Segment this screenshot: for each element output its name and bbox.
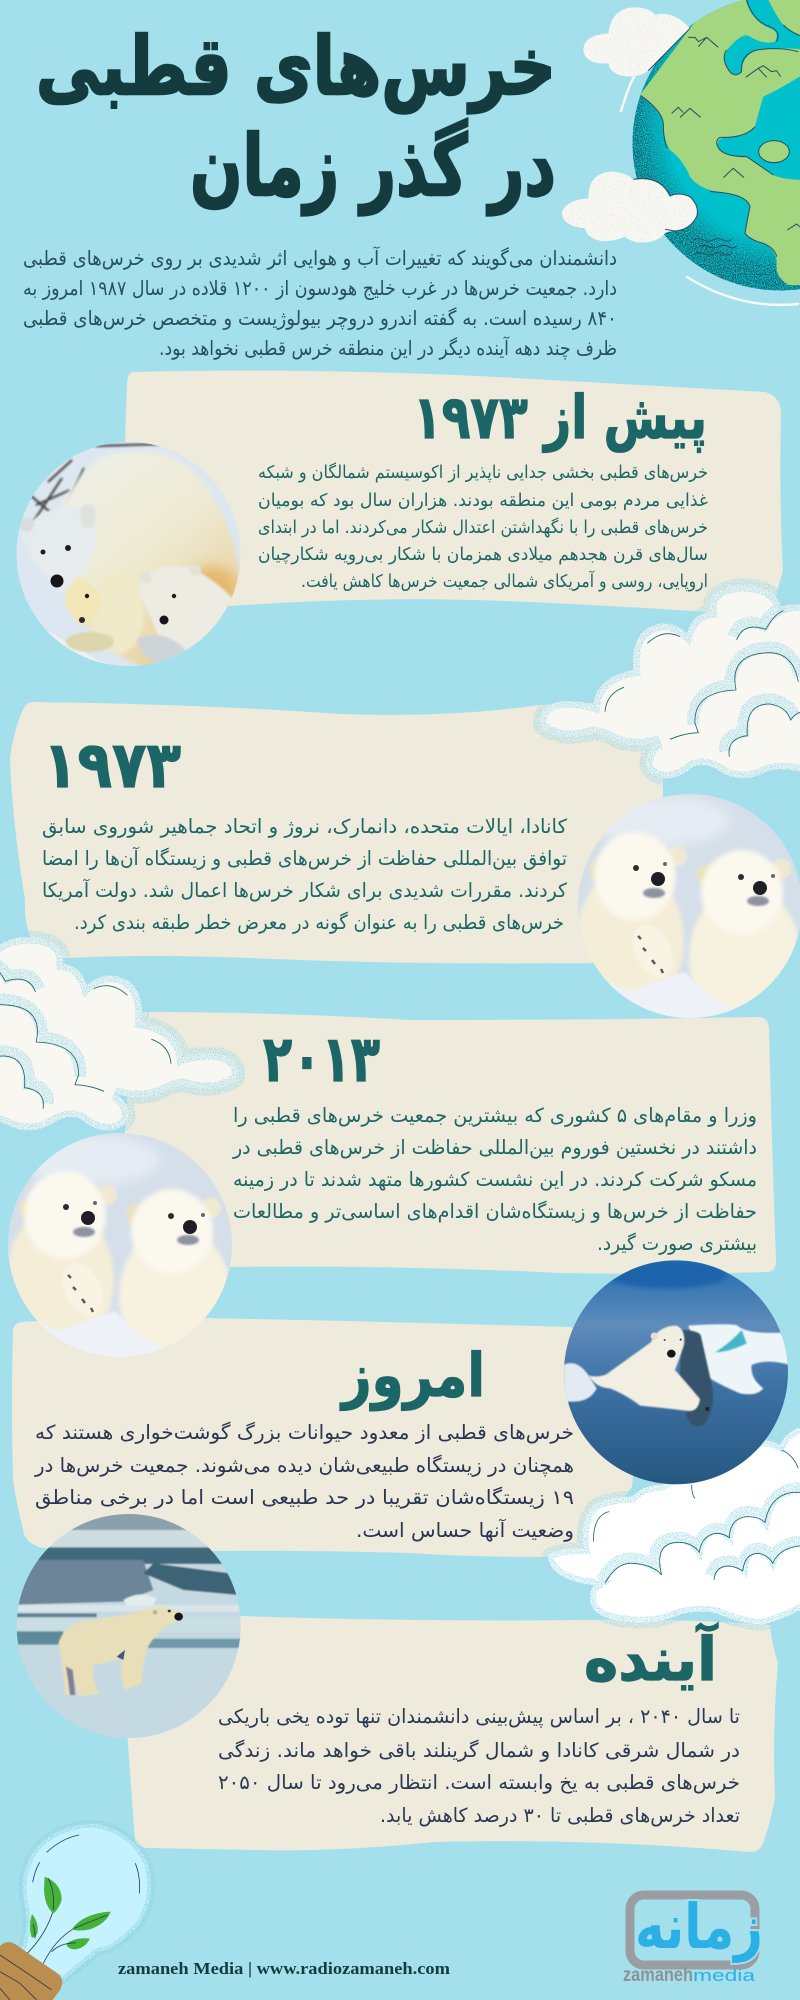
body text: future bbox=[218, 1705, 740, 1827]
body text: before 1973: خرس‌های قطبی بخشی جدایی ناپذیر از اکوسیستم شمالگان و شبکه bbox=[258, 462, 708, 483]
photo: two cubs left bbox=[5, 1130, 235, 1369]
panel: before 1973 bbox=[125, 371, 783, 612]
body text: future: تعداد خرس‌های قطبی تا ۳۰ درصد کاهش یابد. bbox=[380, 1804, 740, 1827]
panel: today bbox=[12, 1318, 640, 1557]
body text: today bbox=[34, 1421, 574, 1542]
logo: zamaneh media: zamaneh bbox=[623, 1965, 693, 1986]
body text: today: وضعیت آنها حساس است. bbox=[356, 1518, 574, 1542]
icon: cloud left of panel three bbox=[0, 937, 238, 1131]
photo: mother bear and cubs bbox=[16, 442, 242, 672]
body text: before 1973 bbox=[258, 462, 708, 592]
body text: future: تا سال ۲۰۴۰ ، بر اساس پیش‌بینی دانشمندان تنها توده یخی باریکی bbox=[218, 1705, 740, 1728]
logo: zamaneh media bbox=[623, 1890, 763, 1986]
panel: future bbox=[127, 1616, 778, 1852]
body text: today: خرس‌های قطبی از معدود حیوانات بزرگ گوشت‌خواری هستند که bbox=[35, 1421, 574, 1444]
intro text: دارد. جمعیت خرس‌ها در غرب خلیج هودسون از ۱۲۰۰ قلاده در سال ۱۹۸۷ امروز به bbox=[23, 276, 617, 300]
body text: 1973 bbox=[42, 815, 568, 934]
body text: before 1973: اروپایی، روسی و آمریکای شمالی جمعیت خرس‌ها کاهش یافت. bbox=[301, 570, 708, 592]
body text: 1973: کردند. مقررات شدیدی برای شکار خرس‌ها اعمال شد. دولت آمریکا bbox=[42, 878, 568, 902]
photo: bear on sea ice bbox=[16, 1514, 241, 1738]
icon: light bulb with plant bbox=[0, 1824, 151, 2000]
body text: 2013 bbox=[232, 1104, 757, 1255]
panel: 2013 bbox=[125, 1012, 776, 1274]
icon: upper cloud bbox=[583, 7, 690, 77]
footer credit: zamaneh Media | www.radiozamaneh.com bbox=[118, 1959, 450, 1978]
body text: before 1973: خرس‌های قطبی را با نگهداشتن اعتدال شکار می‌کردند. اما در ابتدای bbox=[258, 517, 708, 538]
photo: two cubs right bbox=[575, 791, 800, 1030]
intro text: دانشمندان می‌گویند که تغییرات آب و هوایی اثر شدیدی بر روی خرس‌های قطبی bbox=[23, 245, 617, 270]
body text: 2013: داشتند در نخستین فوروم بین‌المللی حفاظت از خرس‌های قطبی در bbox=[232, 1136, 757, 1159]
heading: future: آینده bbox=[584, 1622, 718, 1695]
body text: 2013: وزرا و مقام‌های ۵ کشوری که بیشترین جمعیت خرس‌های قطبی را bbox=[233, 1104, 757, 1127]
body text: 2013: مسکو شرکت کردند. در این نشست کشورها متهد شدند تا در زمینه bbox=[233, 1168, 757, 1191]
intro text: ظرف چند دهه آینده دیگر در این منطقه خرس قطبی نخواهد بود. bbox=[159, 335, 617, 360]
illustration: globe bbox=[632, 0, 800, 291]
body text: 1973: خرس‌های قطبی را به عنوان گونه در معرض خطر طبقه بندی کرد. bbox=[74, 911, 564, 934]
photo: bear on blue ice bbox=[560, 1255, 793, 1488]
heading: today: امروز bbox=[339, 1341, 485, 1411]
icon: cloud right of panel one bbox=[540, 585, 800, 779]
title bbox=[36, 20, 556, 216]
icon: white cloud lower right bbox=[548, 1425, 800, 1625]
body text: 2013: حفاظت از خرس‌ها و زیستگاه‌شان اقدام‌های اساسی‌تر و مطالعات bbox=[233, 1200, 757, 1223]
body text: 1973: توافق بین‌المللی حفاظت از خرس‌های قطبی و زیستگاه آن‌ها را امضا bbox=[42, 846, 567, 870]
icon: lower cloud bbox=[562, 172, 697, 243]
panel: 1973 bbox=[10, 700, 663, 963]
heading: 1973: ۱۹۷۳ bbox=[43, 729, 181, 803]
title: خرس‌های قطبی bbox=[36, 20, 556, 114]
body text: before 1973: غذایی مردم بومی این منطقه بودند. هزاران سال بود که بومیان bbox=[258, 491, 708, 511]
body text: 2013: بیشتری صورت گیرد. bbox=[597, 1232, 757, 1255]
body text: before 1973: سال‌های قرن هجدهم میلادی همزمان با شکار بی‌رویه شکارچیان bbox=[258, 545, 708, 565]
body text: future: در شمال شرقی کانادا و شمال گرینلند باقی خواهد ماند. زندگی bbox=[218, 1739, 740, 1762]
body text: future: خرس‌های قطبی به یخ وابسته است. انتظار می‌رود تا سال ۲۰۵۰ bbox=[218, 1771, 740, 1794]
decorative orbit arcs bbox=[621, 77, 798, 305]
body text: today: همچنان در زیستگاه طبیعی‌شان دیده می‌شوند. جمعیت خرس‌ها در bbox=[34, 1454, 574, 1477]
intro text: ۸۴۰ رسیده است. به گفته اندرو دروچر بیولوژیست و متخصص خرس‌های قطبی bbox=[23, 306, 617, 330]
heading: 2013: ۲۰۱۳ bbox=[263, 1023, 380, 1097]
heading: before 1973: پیش از ۱۹۷۳ bbox=[413, 383, 707, 453]
logo: zamaneh media: media bbox=[693, 1966, 756, 1985]
title: در گذر زمان bbox=[190, 117, 556, 216]
intro text bbox=[23, 245, 617, 360]
logo: zamaneh media: زمانه bbox=[635, 1890, 763, 1963]
body text: 1973: کانادا، ایالات متحده، دانمارک، نروژ و اتحاد جماهیر شوروی سابق bbox=[42, 815, 568, 838]
body text: today: ۱۹ زیستگاه‌شان تقریبا در حد طبیعی است اما در برخی مناطق bbox=[35, 1486, 574, 1509]
